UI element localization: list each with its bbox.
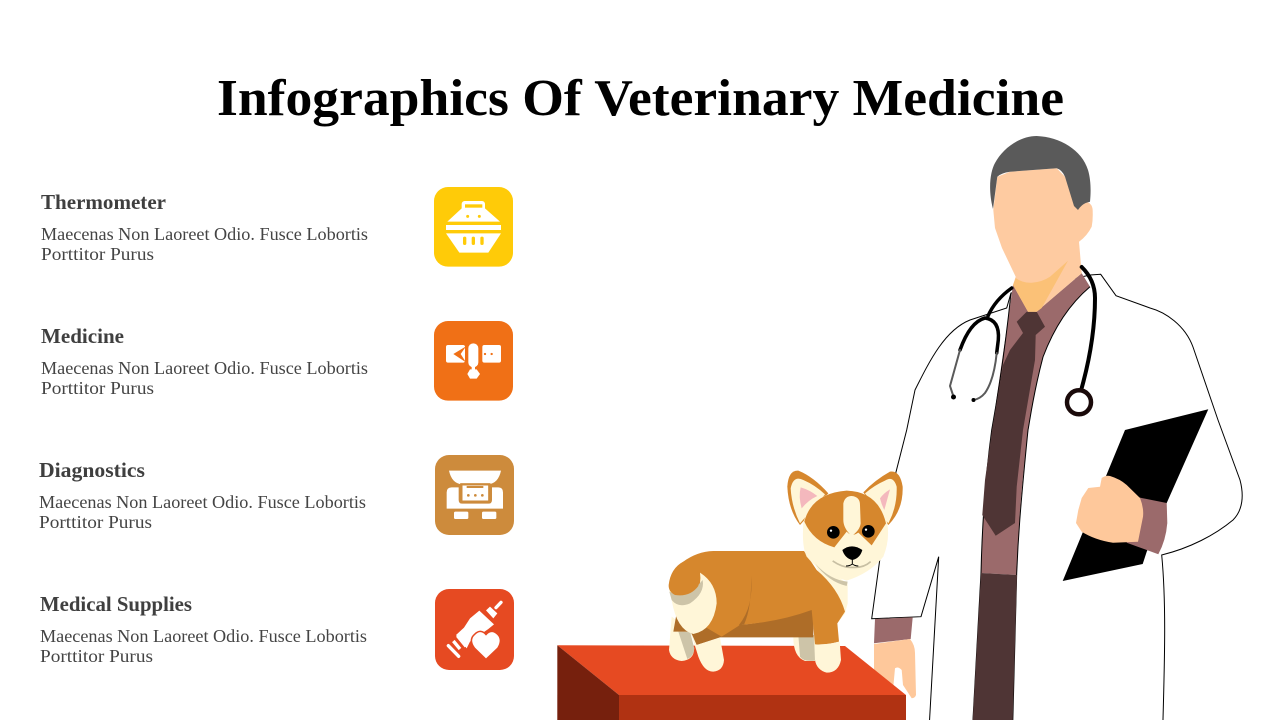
coat lapel edges (973, 287, 1090, 720)
chest (813, 562, 848, 623)
right cuff (1127, 497, 1167, 554)
icon: pet carrier on yellow tile (434, 187, 513, 267)
table left side (557, 645, 619, 720)
neck shadow (1013, 261, 1068, 312)
table front (619, 695, 906, 720)
item: Medicine text: Medicine (41, 324, 124, 348)
face patch (804, 491, 886, 547)
eyes (827, 525, 875, 539)
doctor (872, 136, 1242, 720)
icon: weighing scale on tan tile (435, 455, 514, 535)
item: Medicine text (41, 324, 368, 398)
lab coat (872, 274, 1242, 720)
stethoscope (950, 267, 1095, 414)
item: Thermometer text (41, 190, 368, 264)
belly shadow (673, 607, 813, 645)
item: Thermometer text: Maecenas Non Laoreet Odio. Fusce Lobortis (41, 224, 368, 244)
title: Infographics Of Veterinary Medicine (217, 70, 1064, 127)
hair (990, 136, 1091, 210)
trousers (973, 573, 1017, 720)
item: Medical Supplies text: Porttitor Purus (40, 646, 153, 666)
item: Medical Supplies text: Medical Supplies (40, 592, 192, 616)
far legs (669, 617, 815, 661)
blaze (843, 496, 861, 536)
exam table (557, 645, 906, 720)
item: Diagnostics text: Porttitor Purus (39, 512, 152, 532)
table top (557, 645, 906, 695)
clipboard (1063, 409, 1208, 581)
right ear (863, 472, 903, 525)
icon: collar on orange tile (434, 321, 513, 401)
right hand (1076, 476, 1143, 543)
left ear (787, 471, 828, 525)
near front paw (815, 642, 841, 673)
item: Thermometer text: Porttitor Purus (41, 244, 154, 264)
item: Thermometer text: Thermometer (41, 190, 166, 214)
left cuff (874, 617, 913, 643)
item: Diagnostics text: Diagnostics (39, 458, 145, 482)
body (669, 551, 845, 644)
neck collar shadow (815, 563, 848, 586)
item: Medical Supplies text (40, 592, 367, 666)
head (803, 491, 888, 581)
item: Medical Supplies text: Maecenas Non Laoreet Odio. Fusce Lobortis (40, 626, 367, 646)
nose and mouth (842, 546, 862, 566)
smile (833, 561, 871, 567)
tail (669, 562, 700, 595)
left hand (874, 639, 916, 698)
head and neck (993, 168, 1093, 312)
item: Diagnostics text: Maecenas Non Laoreet Odio. Fusce Lobortis (39, 492, 366, 512)
item: Medicine text: Porttitor Purus (41, 378, 154, 398)
haunch (669, 573, 717, 634)
tie (982, 312, 1045, 536)
item: Medicine text: Maecenas Non Laoreet Odio. Fusce Lobortis (41, 358, 368, 378)
near hind leg (690, 630, 724, 672)
icon: syringe and heart on red tile (435, 589, 514, 670)
corgi puppy (669, 471, 903, 673)
tail shadow (669, 580, 703, 605)
item: Diagnostics text (39, 458, 366, 532)
shirt (981, 273, 1090, 575)
fold line (739, 576, 751, 625)
